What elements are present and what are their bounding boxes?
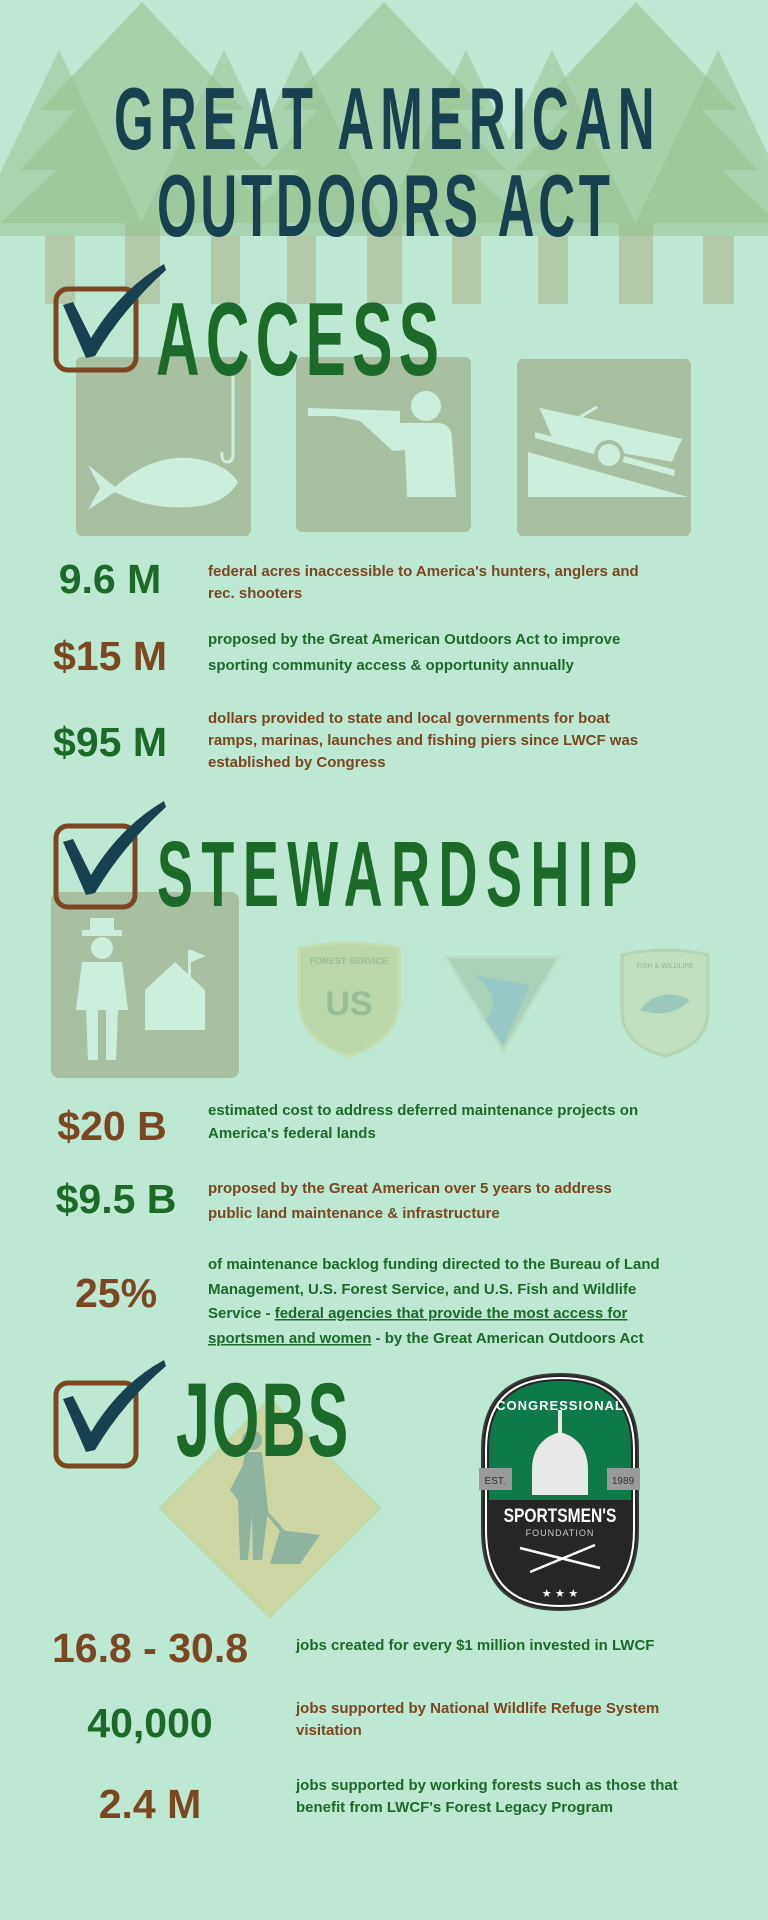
stat: $95 M: dollars provided to state and local governments for boat xyxy=(208,710,610,727)
logo: congressional sportsmen's foundation: 1989 xyxy=(612,1476,635,1487)
icon: road work sign xyxy=(161,1400,379,1616)
stat: 2.4 M xyxy=(99,1777,678,1827)
stat: $95 M xyxy=(53,710,638,771)
heading: stewardship xyxy=(56,801,637,927)
logo: congressional sportsmen's foundation: EST. xyxy=(484,1476,506,1487)
stat: 9.6 M xyxy=(59,556,639,602)
logo: congressional sportsmen's foundation: CONGRESSIONAL xyxy=(496,1398,624,1413)
stat: $9.5 B: public land maintenance & infrastructure xyxy=(208,1205,500,1222)
title: GREAT AMERICAN xyxy=(114,71,655,169)
heading: jobs: JOBS xyxy=(176,1362,348,1479)
logo: fish and wildlife service xyxy=(622,950,708,1056)
logo: congressional sportsmen's foundation: ★ ★ ★ xyxy=(542,1587,578,1600)
heading: stewardship: STEWARDSHIP xyxy=(157,823,637,927)
logo: congressional sportsmen's foundation xyxy=(479,1374,640,1610)
heading: access: ACCESS xyxy=(156,282,439,398)
title xyxy=(114,71,655,256)
stat: 2.4 M: benefit from LWCF's Forest Legacy Program xyxy=(296,1799,613,1816)
stat: 9.6 M: federal acres inaccessible to America's hunters, anglers and xyxy=(208,563,639,580)
stat: $95 M: ramps, marinas, launches and fishing piers since LWCF was xyxy=(208,732,638,749)
logo: forest service xyxy=(299,943,399,1056)
logo: forest service: FOREST SERVICE xyxy=(310,956,388,966)
logo: congressional sportsmen's foundation: FOUNDATION xyxy=(526,1528,594,1538)
heading: jobs xyxy=(56,1360,348,1479)
stat: 25%: Management, U.S. Forest Service, and U.S. Fish and Wildlife xyxy=(208,1281,636,1298)
stat: $20 B: $20 B xyxy=(57,1103,167,1149)
icon: shooting xyxy=(296,357,471,532)
stat: $9.5 B: proposed by the Great American over 5 years to address xyxy=(208,1180,612,1197)
logo: forest service: US xyxy=(325,985,373,1023)
stat: 40,000 xyxy=(87,1700,659,1746)
stat: 25%: of maintenance backlog funding directed to the Bureau of Land xyxy=(208,1256,660,1273)
stat: $95 M: $95 M xyxy=(53,719,167,765)
logo: BLM xyxy=(446,957,559,1051)
forest background xyxy=(0,2,768,304)
stat: 25%: Service - federal agencies that provide the most access for xyxy=(208,1305,628,1322)
stat: $15 M xyxy=(53,631,620,679)
stat: $9.5 B xyxy=(56,1176,612,1222)
stat: 2.4 M: jobs supported by working forests such as those that xyxy=(295,1777,678,1794)
stat: 9.6 M: rec. shooters xyxy=(208,585,302,602)
stat: $20 B xyxy=(57,1102,638,1149)
logo: fish and wildlife service: FISH & WILDLIFE xyxy=(637,963,694,970)
stat: 9.6 M: 9.6 M xyxy=(59,556,161,602)
stat: 40,000: jobs supported by National Wildlife Refuge System xyxy=(295,1700,659,1717)
stat: 25%: sportsmen and women - by the Great American Outdoors Act xyxy=(208,1330,644,1347)
stat: 25% xyxy=(75,1256,660,1347)
stat: $15 M: sporting community access & opportunity annually xyxy=(208,657,575,674)
title: OUTDOORS ACT xyxy=(157,158,610,256)
stat: 16.8 - 30.8: 16.8 - 30.8 xyxy=(52,1625,248,1671)
stat: $15 M: proposed by the Great American Outdoors Act to improve xyxy=(208,631,620,648)
icon: ranger station xyxy=(51,892,239,1078)
stat: 16.8 - 30.8: jobs created for every $1 million invested in LWCF xyxy=(295,1637,654,1654)
logo: congressional sportsmen's foundation: SPORTSMEN'S xyxy=(504,1505,616,1526)
stat: 16.8 - 30.8 xyxy=(52,1625,654,1671)
heading: access xyxy=(56,264,439,398)
stat: $9.5 B: $9.5 B xyxy=(56,1176,176,1222)
stat: 2.4 M: 2.4 M xyxy=(99,1781,201,1827)
stat: 40,000: 40,000 xyxy=(87,1700,213,1746)
stat: $20 B: America's federal lands xyxy=(208,1125,376,1142)
stat: 40,000: visitation xyxy=(296,1722,362,1739)
icon: fishing xyxy=(76,357,251,536)
icon: boat ramp xyxy=(517,359,691,536)
stat: 25%: 25% xyxy=(75,1270,157,1316)
stat: $95 M: established by Congress xyxy=(208,754,386,771)
stat: $15 M: $15 M xyxy=(53,633,167,679)
stat: $20 B: estimated cost to address deferred maintenance projects on xyxy=(208,1102,638,1119)
